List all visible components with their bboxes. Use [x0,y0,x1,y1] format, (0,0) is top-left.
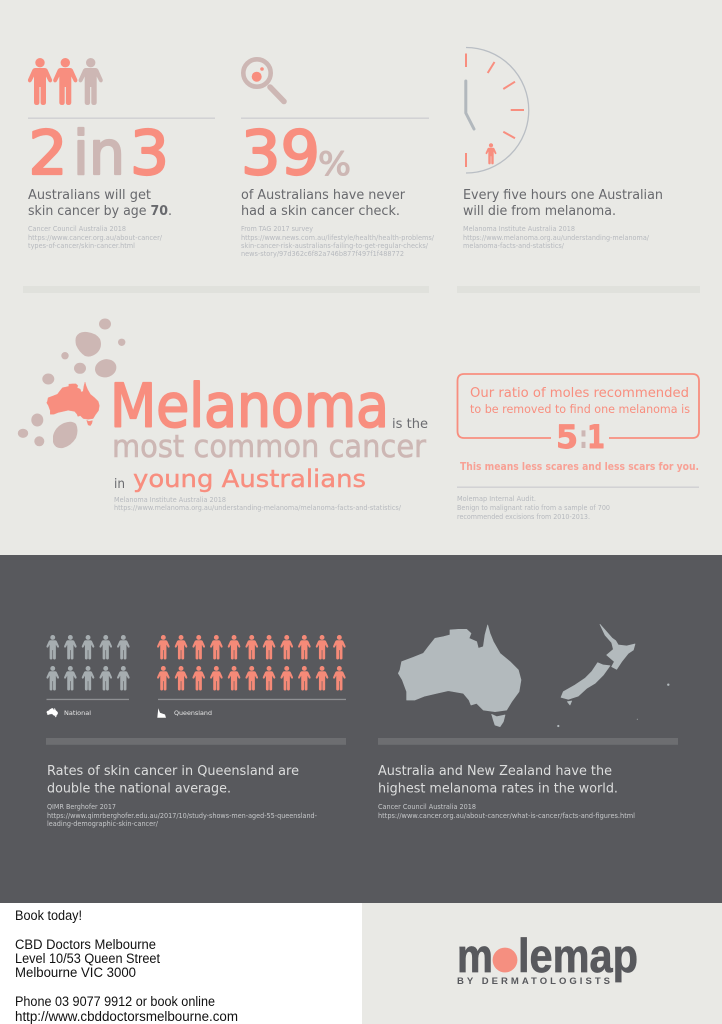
panel: booking details: Melbourne VIC 3000 [15,965,136,980]
panel: melanoma headline [18,318,428,512]
heading: Melanoma: Melanoma [110,372,389,442]
statement text: Australia and New Zealand have the [378,764,612,779]
big number: 39%: % [318,145,351,183]
ratio 5:1: 5 [556,418,578,456]
legend: national: National [64,709,91,717]
logo: molemap by dermatologists: BY DERMATOLOGISTS [457,976,610,987]
panel: every five hours clock [463,48,663,250]
panel: Australia and New Zealand [378,624,678,820]
big number: 2 in 3: in [73,118,125,189]
big number: 2 in 3: 3 [130,118,169,189]
legend: Queensland: Queensland [174,709,212,717]
text: is the: is the [392,417,428,432]
callout box [458,374,699,438]
source [457,495,610,521]
statement text [378,764,618,796]
statement text: had a skin cancer check. [241,204,400,219]
source: skin-cancer-risk-australians-failing-to-get-regular-checks/ [241,242,429,250]
source: https://www.melanoma.org.au/understanding-melanoma/melanoma-facts-and-statistics/ [114,504,402,512]
statement text [28,188,172,219]
pictogram: national people [46,635,130,690]
panel: Queensland vs national [46,635,346,828]
statement text [463,188,663,219]
source: From TAG 2017 survey [241,225,313,233]
source: https://www.cancer.org.au/about-cancer/what-is-cancer/facts-and-figures.html [378,812,635,820]
source: Cancer Council Australia 2018 [378,803,476,811]
statement text [241,188,406,219]
text: in: in [114,476,125,492]
source: leading-demographic-skin-cancer/ [47,820,159,828]
big number: 2 in 3 [28,118,169,189]
legend: Queensland [157,708,212,718]
source [114,496,402,512]
map: Australia and New Zealand [398,624,670,727]
source: Benign to malignant ratio from a sample of 700 [457,504,610,512]
logo: molemap by dermatologists: m [457,929,493,982]
ratio 5:1 [556,418,605,456]
source: Molemap Internal Audit. [457,495,536,503]
source [28,225,163,250]
panel: booking details: Phone 03 9077 9912 or book online [15,994,215,1009]
source: melanoma-facts-and-statistics/ [463,242,565,250]
source: recommended excisions from 2010-2013. [457,513,590,521]
ratio 5:1: : [579,418,588,456]
logo: molemap by dermatologists [457,929,638,987]
dark band background [0,555,722,903]
source: https://www.news.com.au/lifestyle/health/health-problems/ [241,234,435,242]
panel: booking details [0,903,362,1024]
icon: magnifying glass over mole [243,59,284,102]
source: types-of-cancer/skin-cancer.html [28,242,135,250]
statement text: of Australians have never [241,188,406,203]
panel: 39% statistic [241,59,435,258]
source: Melanoma Institute Australia 2018 [463,225,575,233]
statement text: will die from melanoma. [463,204,616,219]
source: news-story/97d362c6f82a746b877f497f1f488772 [241,250,404,258]
source: https://www.qimrberghofer.edu.au/2017/10/study-shows-men-aged-55-queensland- [47,812,318,820]
statement text: Australians will get [28,188,151,203]
callout text [470,386,690,416]
icon: half clock [466,48,529,173]
callout text: to be removed to find one melanoma is [470,402,690,416]
logo: molemap by dermatologists: lemap [518,929,638,982]
source: https://www.cancer.org.au/about-cancer/ [28,234,163,242]
source: Cancer Council Australia 2018 [28,225,126,233]
panel: booking details: CBD Doctors Melbourne [15,937,156,952]
icon: three people [28,58,103,105]
source [241,225,435,258]
source [47,803,318,828]
source: Melanoma Institute Australia 2018 [114,496,226,504]
big number: 39%: 39 [241,118,320,189]
statement text [47,764,299,796]
statement text: skin cancer by age 70. [28,204,172,219]
source [378,803,635,820]
statement text: Every five hours one Australian [463,188,663,203]
panel: 2 in 3 statistic [28,58,215,250]
panel: booking details: http://www.cbddoctorsmelbourne.com [15,1009,238,1024]
panel: ratio callout [457,374,699,521]
source: QIMR Berghofer 2017 [47,803,116,811]
statement text: double the national average. [47,782,231,796]
panel: booking details: Book today! [15,908,82,923]
big number: 2 in 3: 2 [28,118,68,189]
source [463,225,650,250]
source: https://www.melanoma.org.au/understanding-melanoma/ [463,234,650,242]
ratio 5:1: 1 [587,418,605,456]
statement text: Rates of skin cancer in Queensland are [47,764,299,779]
heading: young Australians: young Australians [133,465,366,493]
callout text: Our ratio of moles recommended [470,386,689,401]
legend: national [47,708,91,717]
pictogram: Queensland people [157,635,346,690]
logo: molemap by dermatologists: o [494,942,516,980]
heading: most common cancer: most common cancer [112,429,426,465]
icon: moles around Australia [18,318,125,448]
panel: booking details: Level 10/53 Queen Street [15,951,160,966]
statement text: highest melanoma rates in the world. [378,782,618,796]
